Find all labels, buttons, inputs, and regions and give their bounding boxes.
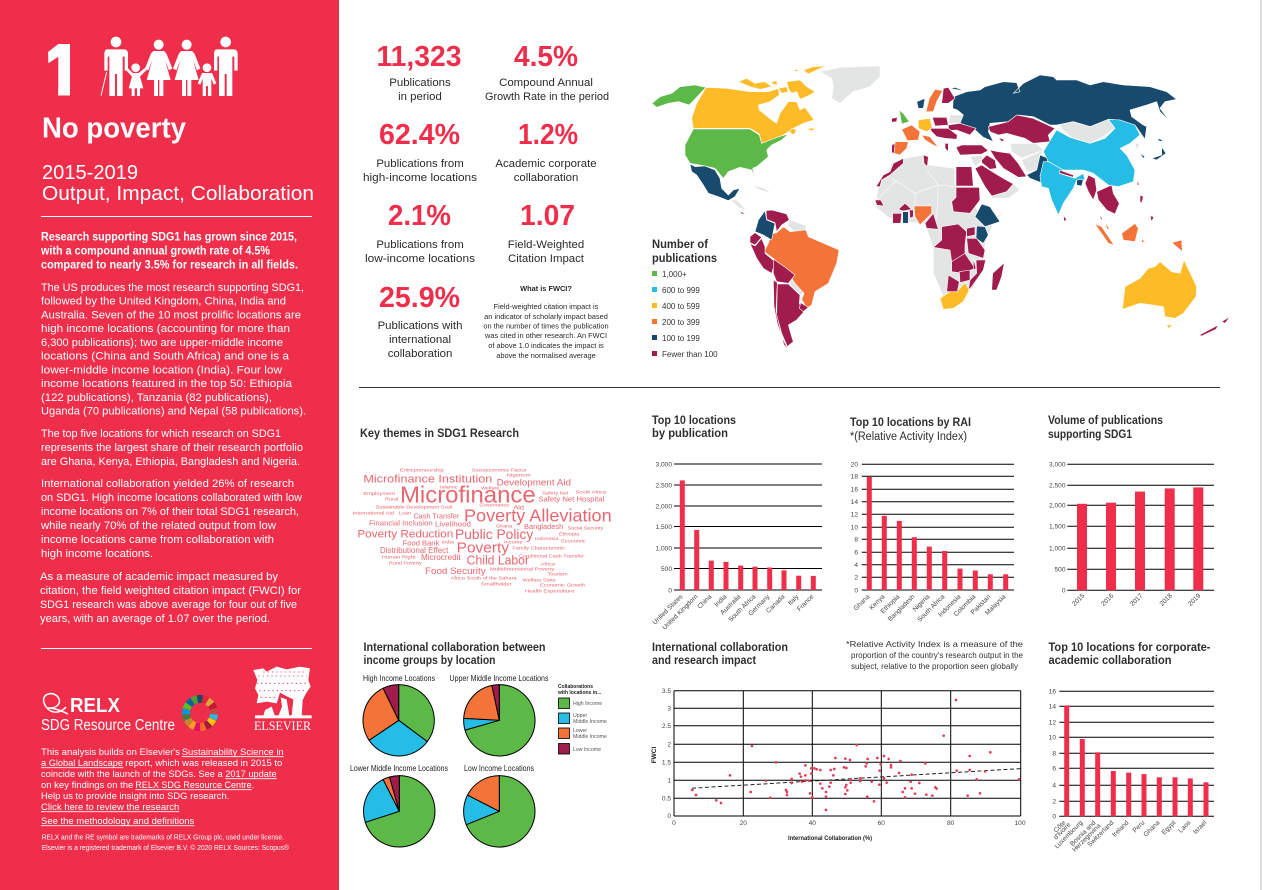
word cloud: Economic [561,538,586,543]
text block: footer links: See the methodology and definitions [41,816,194,827]
bar chart: corporate-academic: 2 [1052,798,1056,806]
word cloud: Distributional Effect [380,546,449,555]
bar chart: top 10 by publication: 2,000 [655,504,672,510]
scatter chart: 3 [667,706,671,712]
word cloud: Livelihood [435,519,471,528]
heading: corporate-academic [1048,640,1210,667]
text block: research portfolio: are Ghana, Kenya, Ethiopia, Bangladesh and Nigeria. [41,456,300,468]
text block: top locations: income locations featured in the top 50: Ethiopia [41,378,293,390]
stat: FWCI: Citation Impact [508,253,585,265]
word cloud: Sustainable Development Goal [376,505,452,510]
bar chart: volume of publications: 2016 [1100,592,1116,608]
bar chart: top 10 by publication: 0 [668,588,672,594]
pie legend: with locations in... [557,690,602,696]
heading: volume of publications: Volume of publications [1048,413,1163,427]
subheading: Output, Impact, Collaboration [42,183,314,205]
pie: high income [363,674,435,756]
bar chart: corporate-academic: Switzerland [1086,819,1116,849]
word cloud: Welfare [481,486,500,491]
word cloud: Conditional Cash Transfer [519,554,585,559]
stat: growth rate: Growth Rate in the period [485,91,609,103]
word cloud: Indonesia [535,536,559,541]
bar chart: top 10 by RAI: 12 [851,512,858,518]
word cloud: Entrepreneurship [400,468,444,473]
bar chart: top 10 by RAI: Pakistan [970,593,993,616]
bar chart: top 10 by publication: 2,500 [655,482,672,490]
pie legend: Collaborations [558,684,593,690]
bar chart: top 10 by RAI: 10 [851,524,858,532]
heading: collaboration and impact [652,640,788,667]
heading: corporate-academic: academic collaboration [1048,653,1172,667]
bar chart: top 10 by publication: Canada [765,593,787,615]
scatter chart [651,688,1026,842]
note: relative activity index: proportion of the country's research output in the [851,650,1023,660]
pie: low income: Low Income Locations [464,764,534,773]
word cloud: Tourism [547,572,568,577]
stat: international [378,282,462,360]
word cloud: India [442,540,454,545]
bar chart: top 10 by publication: 1,000 [655,546,672,552]
word cloud: Microcredit [421,553,461,562]
logo: Elsevier [253,667,312,733]
bar chart: corporate-academic: Ireland [1111,819,1131,839]
bar chart: corporate-academic: 10 [1049,734,1056,742]
bar chart: corporate-academic: Egypt [1161,819,1178,836]
bar chart: corporate-academic: Laos [1177,819,1193,835]
bar chart: top 10 by RAI: 8 [854,536,858,544]
text block: research portfolio: The top five locations for which research on SDG1 [41,428,281,440]
bar chart: top 10 by RAI: 2 [854,574,858,582]
callout: what is FWCI [483,284,609,360]
heading: volume of publications [1048,413,1163,441]
text block: top locations: The US produces the most research supporting SDG1, [41,282,304,294]
text block: research portfolio [41,428,303,468]
bar chart: volume of publications: 2,000 [1049,502,1066,510]
heading: corporate-academic: Top 10 locations for corporate- [1048,640,1210,654]
text block: footer links: on key findings on the [41,780,133,791]
callout: what is FWCI: on the number of times the publication [483,322,609,330]
stat: low-income: low-income locations [365,253,475,265]
map legend: Number of [652,237,709,251]
bar chart: volume of publications: 0 [1062,588,1066,594]
logo: RELX SDG Resource Centre [41,694,175,734]
bar chart: volume of publications: 2017 [1129,592,1145,608]
callout: what is FWCI: of above 1.0 indicates the impact is [488,341,604,350]
subheading [42,162,314,205]
word cloud: Development Aid [497,478,571,488]
note: relative activity index: subject, relative to the proportion seen globally [851,661,1019,671]
callout: what is FWCI: What is FWCI? [520,284,572,293]
subheading: 2015-2019 [42,162,138,184]
bar chart: top 10 by publication: Italy [787,593,801,607]
bar chart: volume of publications: 2,500 [1049,482,1066,490]
text block: collaboration: on SDG1. High income locations collaborated with low [41,492,303,504]
bar chart: top 10 by RAI: South Africa [916,593,947,624]
scatter chart: 1.5 [662,760,671,766]
word cloud: Employment [363,491,396,496]
bar chart: corporate-academic: 6 [1052,766,1056,772]
stat: international: international [389,334,451,346]
map: Europe and Africa [875,75,1177,309]
text block: footer links: . [252,780,254,791]
callout: what is FWCI: above the normalised average [496,351,596,360]
word cloud: Food Bank [403,538,440,547]
word cloud: Ghana [496,524,513,529]
stat: publications: in period [398,91,442,103]
bar chart: corporate-academic: Bosnia and [1069,819,1098,848]
text block: collaboration [40,478,303,560]
text block: legal: Elsevier is a registered trademark of Elsevier B.V. © 2020 RELX Sources: Scopus® [42,843,289,852]
bar chart: corporate-academic: Israel [1192,819,1209,836]
heading: top 10 locations by publication: Top 10 locations [652,413,736,427]
note: relative activity index [846,639,1023,671]
logo: RELX SDG Resource Centre: RELX [70,694,120,717]
word cloud: Public Policy [455,526,533,542]
heading: top 10 by RAI: *(Relative Activity Index) [850,431,967,443]
word cloud: Welfare State [523,578,556,584]
pie legend: High Income [573,701,602,707]
text block: intro: Research supporting SDG1 has grown since 2015, [41,230,297,244]
text block: footer links: a Global Landscape [41,758,123,769]
bar chart: corporate-academic: Côte [1053,819,1068,834]
heading: income groups: income groups by location [364,653,496,667]
text block: top locations: followed by the United Kingdom, China, India and [41,296,286,308]
text block: legal: RELX and the RE symbol are trademarks of RELX Group plc, used under license. [42,832,284,842]
text block: footer links: Sustainability Science in [182,747,284,758]
pie legend: Upper [573,713,587,719]
bar chart: top 10 by RAI: 4 [854,562,858,569]
word cloud: Bangladesh [524,522,563,531]
bar chart: top 10 by publication: India [713,593,729,609]
bar chart: top 10 by RAI [851,462,1014,624]
heading: collaboration and impact: International collaboration [652,640,788,654]
word cloud: Human Right [382,555,417,560]
word cloud: Safety Net [542,491,569,496]
bar chart: top 10 by publication [651,462,822,632]
stat: publications [376,41,462,103]
stat: growth rate: Compound Annual [499,77,593,89]
bar chart: corporate-academic: Ghana [1142,819,1162,838]
bar chart: volume of publications: 2019 [1187,592,1203,608]
bar chart: top 10 by publication: 500 [661,566,672,573]
scatter chart: 60 [878,820,885,827]
bar chart: corporate-academic: Peru [1132,819,1147,834]
stat: low-income: 2.1% [388,200,451,232]
heading: volume of publications: supporting SDG1 [1048,427,1132,441]
bar chart: corporate-academic: 12 [1049,720,1056,726]
bar chart: corporate-academic: 0 [1052,814,1056,820]
heading: goal name: No poverty [42,112,186,144]
text block: intro [40,230,298,272]
text block: top locations: Uganda (70 publications) and Nepal (58 publications). [41,406,306,418]
word cloud: Family Characteristic [512,546,566,551]
heading: top 10 by RAI: Top 10 locations by RAI [850,415,971,429]
callout: what is FWCI: an indicator of scholarly impact based [484,312,608,321]
bar chart: corporate-academic: 14 [1049,704,1056,710]
word cloud: Economic Growth [540,583,585,588]
word cloud [353,468,612,593]
bar chart: top 10 by RAI: 0 [854,588,858,594]
word cloud: Microfinance Institution [363,473,492,485]
bar chart: top 10 by RAI: 16 [851,486,858,494]
word cloud: Islamic [440,485,458,490]
logo: Elsevier: ELSEVIER [254,719,312,733]
bar chart: top 10 by publication: Australia [719,593,743,617]
bar chart: volume of publications: 2015 [1071,592,1087,608]
text block: academic impact: citation, the field weighted citation impact (FWCI) for [40,585,301,597]
word cloud: Poverty [457,540,510,556]
word cloud: South Africa [576,490,606,495]
scatter chart: FWCI [651,747,658,763]
bar chart: top 10 by RAI: Kenya [868,593,887,612]
text block: footer links: report, which was released in 2015 to [125,758,282,769]
stat: growth rate: 4.5% [514,41,578,73]
heading: income groups: International collaboration between [364,640,546,654]
bar chart: top 10 by RAI: Nigeria [912,593,932,613]
bar chart: top 10 by RAI: 14 [851,499,858,506]
map legend: 100 to 199 [662,334,700,343]
text block: top locations: Australia. Seven of the 10 most prolific locations are [41,310,301,322]
panel: left sidebar [0,0,339,890]
stat: high-income: 62.4% [379,119,460,151]
heading: key themes: Key themes in SDG1 Research [360,426,519,440]
stat: international: 25.9% [379,282,460,314]
word cloud: Child Labor [467,553,529,567]
bar chart: top 10 by RAI: Ethiopia [880,593,902,615]
text block: academic impact [40,571,301,625]
word cloud: Health Expenditure [525,588,575,593]
bar chart: top 10 by RAI: 18 [851,474,858,480]
bar chart: top 10 by publication: France [796,593,816,613]
scatter chart: 40 [809,820,816,827]
note: relative activity index: *Relative Activity Index is a measure of the [846,639,1023,649]
word cloud: Africa South of the Sahara [451,576,517,581]
text block: footer links: RELX SDG Resource Centre [135,780,252,791]
scatter chart: 100 [1014,820,1026,827]
bar chart: corporate-academic: Luxembourg [1054,819,1085,850]
word cloud: Poverty Reduction [357,529,453,541]
bar chart: top 10 by RAI: Bangladesh [887,593,917,623]
map: Asia and Oceania [1040,119,1230,336]
callout: what is FWCI: Field-weighted citation impact is [494,302,599,311]
pie: low income [464,764,535,847]
goal number [48,44,70,96]
scatter chart: International Collaboration (%) [788,835,872,842]
bar chart: corporate-academic: Herzegovina [1071,822,1103,854]
text block: academic impact: SDG1 research was above average for four out of five [40,599,297,611]
pie: high income: High Income Locations [363,674,435,683]
pie legend: Low Income [573,747,601,753]
stat: FWCI [508,200,585,265]
bar chart: volume of publications: 1,500 [1049,524,1066,530]
word cloud: Smallholder [481,582,512,587]
text block: top locations: 6,300 publications); two are upper-middle income [41,337,283,349]
map: Americas [652,66,880,353]
text block: footer links: This analysis builds on Elsevier's [41,747,180,758]
stat: high-income: Publications from [376,158,464,170]
text block: footer links: coincide with the launch of the SDGs. See a [41,769,223,780]
stat: publications: Publications [389,77,451,89]
word cloud: Social Security [568,525,604,530]
text block: collaboration: International collaboration yielded 26% of research [41,478,294,490]
heading: top 10 by RAI [850,415,971,443]
map legend: 200 to 399 [662,318,700,327]
word cloud: Microfinance [400,482,536,508]
bar chart: top 10 by publication: United States [651,593,685,626]
map legend [652,237,718,359]
text block: top locations: lower-middle income location (India). Four low [41,364,283,376]
bar chart: top 10 by RAI: Ghana [852,593,872,612]
text block: footer links [41,747,284,827]
scatter chart: 0 [667,813,671,820]
word cloud: Loan [399,511,411,516]
scatter chart: 20 [740,820,747,827]
bar chart: top 10 by RAI: 20 [851,462,858,468]
bar chart: corporate-academic: 8 [1052,750,1056,758]
stat: international: collaboration [388,348,452,360]
stat: high-income [363,119,477,184]
scatter chart: 2 [667,742,671,748]
panel: key statistics [363,41,609,360]
scatter chart: 2.5 [662,723,671,730]
scatter chart: 80 [947,820,955,827]
text block: academic impact: years, with an average of 1.07 over the period. [40,613,270,625]
text block: footer links: 2017 update [225,769,277,780]
word cloud: Multidimensional Poverty [490,567,555,573]
word cloud: Financial Inclusion [369,518,433,527]
bar chart: top 10 by publication: 1,500 [655,524,672,531]
map legend: 600 to 999 [662,286,700,295]
text block: top locations: (122 publications), Tanzania (82 publications), [41,392,272,404]
bar chart: top 10 by publication: China [696,593,714,611]
bar chart: corporate-academic: d'Ivoire [1053,821,1073,841]
text block: academic impact: As a measure of academic impact measured by [40,571,278,583]
text block: collaboration: high income locations. [41,548,153,560]
scatter chart: 0.5 [662,796,671,802]
word cloud: International Aid [353,511,394,516]
word cloud: Governance [479,503,510,508]
bar chart: top 10 by RAI: 6 [854,550,858,556]
word cloud: Rural [385,497,398,502]
stat: publications: 11,323 [376,41,462,73]
bar chart: top 10 by publication: South Africa [727,593,758,624]
bar chart: corporate-academic: 4 [1052,782,1056,790]
map legend: 400 to 599 [662,302,700,311]
word cloud: Ethiopia [559,531,580,536]
pie: upper middle income [450,674,548,756]
word cloud: Socioeconomic Factor [472,468,527,473]
text block: top locations: locations (China and South Africa) and one is a [41,351,290,363]
bar chart: top 10 by publication: United Kingdom [661,593,700,632]
text block: top locations: high income locations (accounting for more than [41,323,290,335]
text block: top locations [41,282,306,418]
stat: FWCI: Field-Weighted [508,239,584,251]
word cloud: Poverty Alleviation [464,506,612,526]
world map [652,66,1230,353]
pie legend: Middle Income [573,719,607,725]
bar chart: top 10 by RAI: Malaysia [984,593,1008,617]
stat: corporate: 1.2% [518,119,578,151]
bar chart: top 10 by publication: 3,000 [655,462,672,468]
word cloud: Nigerium [507,473,531,478]
word cloud: Aid [513,504,524,511]
bar chart: volume of publications [1049,462,1214,608]
logo: RELX SDG Resource Centre: SDG Resource Centre [41,717,175,734]
word cloud: Income [504,540,523,545]
icon: SDG wheel [180,693,220,733]
map legend: Fewer than 100 [662,350,718,359]
stat: international: Publications with [378,320,462,332]
stat: FWCI: 1.07 [520,200,575,232]
text block: research portfolio: represents the largest share of their research portfolio [41,442,303,454]
scatter chart: 3.5 [662,688,671,695]
text block: footer links: Help us to provide insight into SDG research. [41,791,229,802]
word cloud: Safety Net Hospital [538,495,605,504]
stat: high-income: high-income locations [363,172,477,184]
text block: intro: compared to nearly 3.5% for research in all fields. [41,258,298,272]
bar chart: top 10 by publication: Germany [747,593,772,618]
pie legend [557,684,607,754]
heading: top 10 locations by publication [652,413,736,440]
word cloud: Cash Transfer [413,511,460,520]
heading: collaboration and impact: and research impact [652,653,756,667]
bar chart: volume of publications: 2018 [1159,592,1174,608]
scatter chart: 0 [672,820,676,827]
stat: low-income [365,200,475,265]
bar chart: corporate-academic [1049,688,1214,854]
bar chart: volume of publications: 1,000 [1049,546,1066,552]
heading: income groups [364,640,546,667]
goal number: 1 [41,29,85,112]
word cloud: Food Security [425,566,486,576]
bar chart: volume of publications: 500 [1054,566,1066,574]
pie legend: Lower [573,728,587,734]
stat: corporate: Academic corporate [495,158,597,170]
text block: collaboration: while nearly 70% of the related output from low [40,520,277,532]
text block: legal [42,832,289,852]
stat: low-income: Publications from [376,239,464,251]
bar chart: top 10 by RAI: Indonesia [937,593,963,619]
text block: collaboration: income locations on 7% of their total SDG1 research, [41,506,299,518]
callout: what is FWCI: was cited in other research. An FWCI [484,331,607,340]
text block: intro: with a compound annual growth rate of 4.5% [40,244,270,258]
heading: top 10 locations by publication: by publication [652,426,728,440]
bar chart: top 10 by RAI: Colombia [953,593,978,618]
pie: upper middle income: Upper Middle Income Locations [450,674,548,683]
text block: collaboration: income locations came from collaboration with [41,534,274,546]
scatter chart: 1 [667,778,671,784]
map legend: 1,000+ [662,270,687,279]
stat: growth rate [485,41,609,103]
word cloud: Rural Poverty [389,561,422,566]
stat: corporate [495,119,597,184]
icon: family [101,37,238,96]
text block: footer links: Click here to review the research [41,802,179,813]
bar chart: corporate-academic: 16 [1049,688,1056,696]
bar chart: volume of publications: 3,000 [1049,462,1066,468]
stat: corporate: collaboration [514,172,578,184]
word cloud: Africa [541,561,555,566]
pie legend: Middle Income [573,734,607,740]
pie: lower middle income [350,764,448,847]
pie: lower middle income: Lower Middle Income Locations [350,764,448,773]
map legend: publications [652,251,717,265]
